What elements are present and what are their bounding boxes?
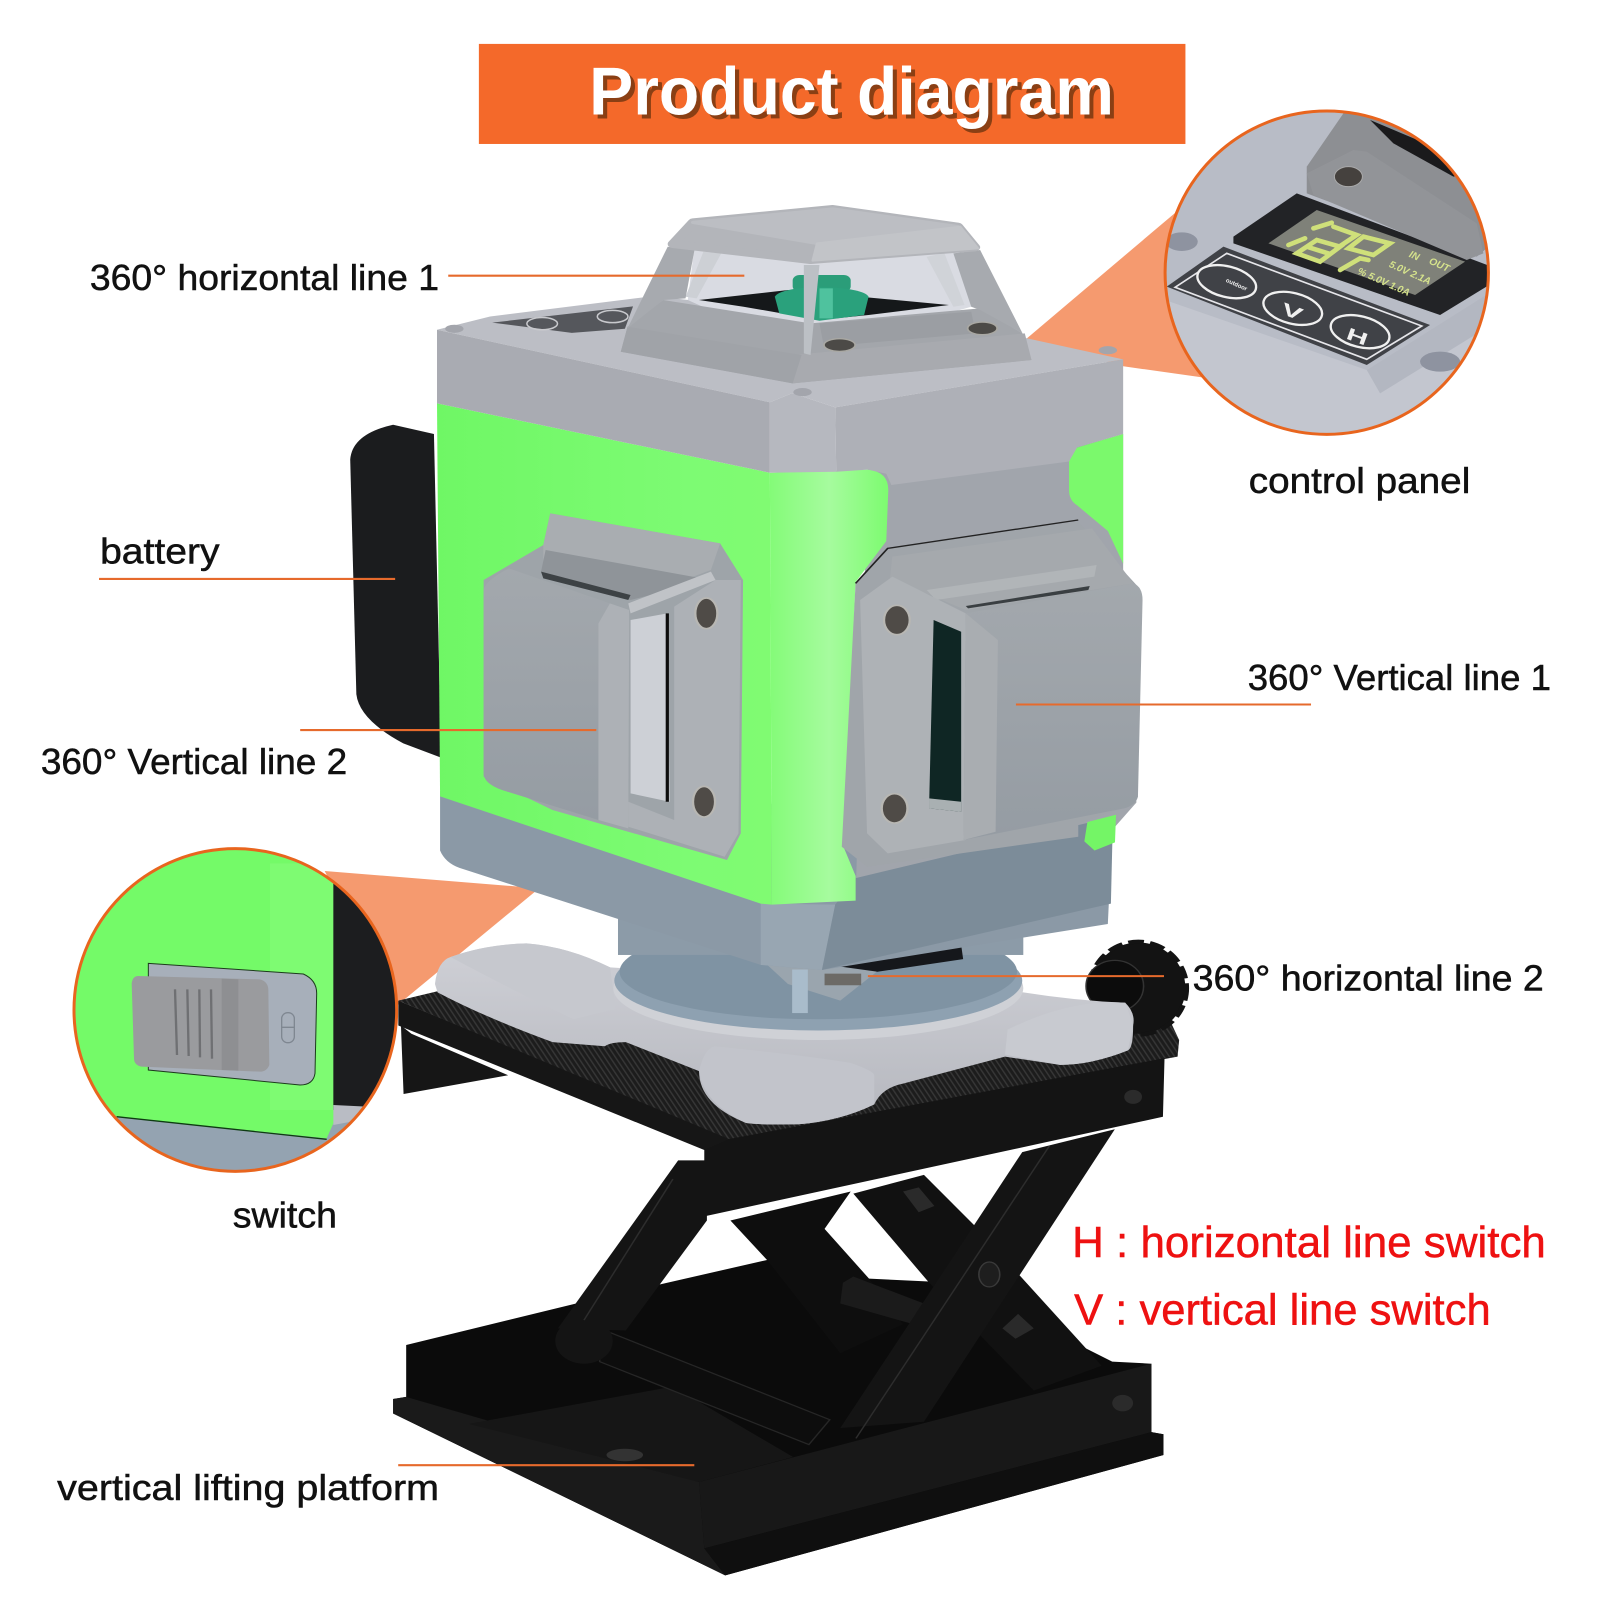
panel surface	[1166, 112, 1487, 370]
top plate	[398, 967, 1179, 1216]
label: 360° Vertical line 1: 360° Vertical line 1	[1248, 658, 1551, 698]
top laser hood	[621, 209, 1032, 383]
LCD digits	[1288, 223, 1390, 270]
green laser head	[775, 275, 869, 321]
wedge: control panel callout	[1026, 209, 1205, 378]
lifting platform	[393, 909, 1186, 1575]
base tray	[393, 1260, 1163, 1575]
right laser module	[842, 520, 1143, 867]
green right tab lower	[1084, 815, 1116, 851]
detail circle: switch	[70, 843, 403, 1180]
turntable disc and neck	[613, 909, 1023, 1040]
label: switch: switch	[233, 1195, 337, 1235]
housing body	[437, 296, 1136, 970]
circle outline	[1165, 111, 1488, 434]
LCD text: % 5.0V 1.0A	[1356, 266, 1411, 299]
button strip: H	[1344, 324, 1370, 350]
LCD text: OUT	[1427, 256, 1452, 275]
battery pack	[350, 425, 441, 758]
housing cap corner	[770, 393, 836, 473]
green right tab upper	[1069, 434, 1123, 564]
hood screws	[824, 322, 997, 351]
LCD text	[1358, 251, 1451, 296]
button strip	[1167, 247, 1430, 365]
scissor arms	[555, 1129, 1115, 1445]
wedge: switch callout	[325, 871, 539, 1009]
detail circle: control panel	[1164, 110, 1490, 436]
button strip: V	[1279, 300, 1305, 324]
leader line: 360° horizontal line 1	[448, 275, 744, 277]
leader line: 360° vertical line 2	[300, 729, 596, 731]
module cover	[963, 583, 1143, 840]
LCD text: IN	[1407, 249, 1422, 264]
module screws	[693, 598, 717, 817]
leader line: battery	[99, 578, 395, 580]
leader line: 360° horizontal line 2	[868, 975, 1164, 977]
left laser module	[484, 513, 743, 860]
grey base band	[116, 1116, 350, 1170]
mounting holes	[1166, 232, 1198, 251]
dark platform under hood	[699, 290, 949, 320]
button marks on strip	[527, 310, 628, 330]
leader line: 360° vertical line 1	[1016, 704, 1311, 706]
label: 360° Vertical line 2: 360° Vertical line 2	[41, 742, 347, 782]
leader line: vertical lifting platform	[398, 1464, 694, 1466]
LCD text: 5.0V 2.1A	[1387, 259, 1432, 288]
button strip: outdoor	[1225, 278, 1248, 293]
module window	[929, 620, 961, 812]
hood pillars	[628, 247, 694, 328]
green shell corner	[770, 470, 888, 905]
legend: V vertical line switch: V : vertical line switch	[1074, 1285, 1491, 1334]
slider	[132, 976, 269, 1072]
levelling knob	[1086, 942, 1186, 1035]
label: control panel: control panel	[1249, 461, 1470, 501]
button strip on top	[492, 306, 633, 333]
slider ribs	[175, 989, 212, 1059]
module screws	[882, 605, 910, 823]
lock icon	[282, 1013, 294, 1043]
label: 360° horizontal line 1: 360° horizontal line 1	[90, 258, 439, 298]
product: laser level on lifting platform	[350, 209, 1186, 1575]
label: 360° horizontal line 2: 360° horizontal line 2	[1193, 958, 1544, 998]
hood window	[688, 247, 971, 353]
legend: H horizontal line switch: H : horizontal line switch	[1072, 1218, 1546, 1267]
switch plate	[148, 963, 317, 1085]
hood corner	[1307, 113, 1488, 260]
holes on cap	[445, 325, 464, 333]
label: vertical lifting platform: vertical lifting platform	[57, 1468, 439, 1508]
title banner	[479, 44, 1185, 144]
lower band	[440, 791, 1113, 970]
title banner: Product diagram	[593, 58, 1118, 133]
LCD bezel	[1233, 193, 1492, 315]
green shell left face	[437, 403, 772, 905]
rotating base plate	[435, 943, 1134, 1125]
circle outline	[74, 849, 397, 1171]
lower right wall	[822, 817, 1113, 970]
right housing wall	[856, 434, 1136, 899]
module cover	[484, 568, 610, 820]
green shell	[76, 850, 334, 1138]
hood base	[621, 300, 1032, 383]
slider shading	[222, 979, 238, 1071]
title banner: Product diagram	[589, 54, 1114, 129]
housing cap right face	[835, 359, 1123, 485]
hood roof	[673, 209, 978, 261]
label: battery: battery	[100, 532, 220, 572]
housing cap left face	[437, 330, 770, 473]
module window	[631, 613, 670, 802]
LCD	[1268, 210, 1465, 295]
battery strip	[333, 884, 396, 1110]
housing top face	[437, 296, 1123, 407]
